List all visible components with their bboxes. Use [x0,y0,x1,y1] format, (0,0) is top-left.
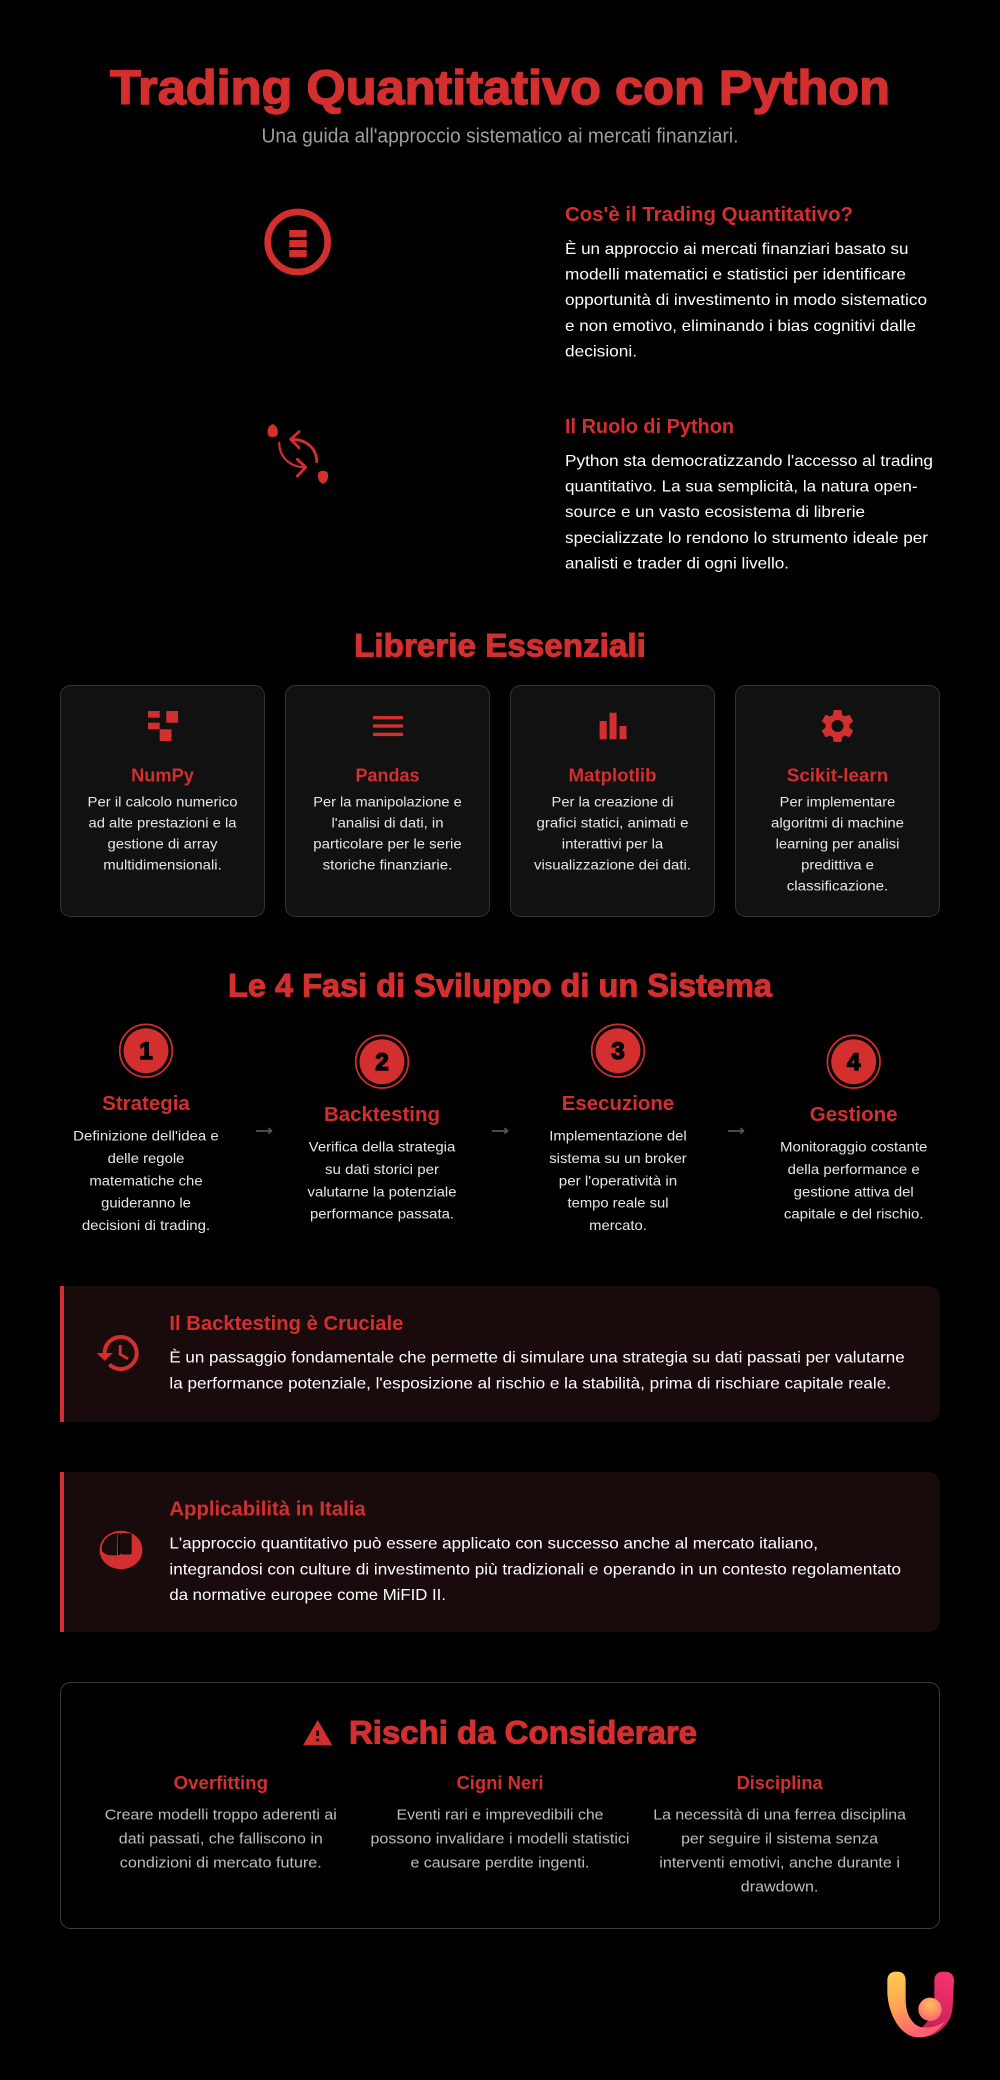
arrow: step 3 to 4 [728,1128,744,1134]
risk: Cigni Neri: Cigni Neri [456,1773,544,1793]
panel: Matplotlib [510,686,714,916]
badge: 2: 2 [375,1049,389,1076]
panel: backtesting callout [60,1286,940,1422]
description: Gestione: della performance e [788,1161,920,1177]
text block: backtesting: È un passaggio fondamentale che permette di simulare una strategia su dati passati per valutarne [169,1348,905,1367]
title: Trading Quantitativo con Python [110,62,890,115]
text block: what is quant trading [565,239,927,360]
description: Gestione [780,1138,928,1222]
description: Backtesting: valutarne la potenziale [308,1183,457,1199]
description: Strategia: decisioni di trading. [82,1217,210,1233]
description: Scikit-learn: learning per analisi [776,836,899,852]
description: Pandas [313,794,462,873]
description: Matplotlib [534,794,691,873]
badge: 3: 3 [611,1038,625,1065]
icon: history clock [97,1335,139,1371]
description: NumPy [88,794,238,873]
heading: risks: Rischi da Considerare [349,1714,697,1750]
description: Scikit-learn [771,794,904,894]
step 1: Strategia [73,1024,219,1233]
description: Esecuzione: per l'operatività in [559,1172,677,1188]
heading: backtesting: Il Backtesting è Cruciale [169,1313,403,1335]
description: Strategia: Definizione dell'idea e [73,1128,219,1144]
risk: Cigni Neri [370,1773,630,1871]
label: Scikit-learn: Scikit-learn [787,766,888,786]
risk: Disciplina: per seguire il sistema senza [681,1830,879,1847]
panel: applicability in Italy [60,1472,940,1632]
text block: role of python [565,453,933,572]
text block: role of python: quantitativo. La sua semplicità, la natura open- [565,479,918,496]
description: Pandas: l'analisi di dati, in [332,815,444,831]
risk: Overfitting: dati passati, che falliscono in [119,1830,323,1847]
arrow: step 1 to 2 [256,1128,272,1134]
description: Esecuzione [549,1128,687,1233]
description: Strategia: delle regole [108,1150,185,1166]
logo [887,1972,954,2037]
description: NumPy: gestione di array [108,836,218,852]
heading: libraries: Librerie Essenziali [354,628,646,664]
description: Matplotlib: Per la creazione di [552,794,674,810]
description: NumPy: multidimensionali. [103,857,222,873]
risk: Disciplina: drawdown. [741,1878,818,1895]
panel: NumPy [60,686,264,916]
heading: what is quant trading: Cos'è il Trading Quantitativo? [565,204,853,226]
heading: role of python: Il Ruolo di Python [565,416,734,438]
text block: what is quant trading: e non emotivo, eliminando i bias cognitivi dalle [565,318,916,335]
description: Scikit-learn: classificazione. [787,878,888,894]
risk: Overfitting: Overfitting [174,1773,268,1793]
icon: warning [303,1720,332,1745]
header [110,62,890,148]
risk: Disciplina: Disciplina [737,1773,824,1793]
text block: what is quant trading: opportunità di investimento in modo sistematico [565,292,927,309]
icon: gear [822,710,853,742]
step 4: Gestione [780,1035,928,1222]
text block: what is quant trading: decisioni. [565,343,637,360]
panel: Scikit-learn [736,686,940,916]
description: Pandas: particolare per le serie [313,836,462,852]
heading: development phases: Le 4 Fasi di Sviluppo di un Sistema [228,968,772,1004]
label: Strategia: Strategia [102,1093,191,1115]
risk: Overfitting: Creare modelli troppo aderenti ai [105,1806,337,1823]
text block: backtesting [169,1348,905,1393]
label: Gestione: Gestione [810,1104,898,1126]
section: what is quant trading [268,204,927,360]
risk: Cigni Neri: e causare perdite ingenti. [410,1854,590,1871]
icon: python arrows [268,424,328,484]
text block: Italy: L'approccio quantitativo può essere applicato con successo anche al mercato italiano, [169,1536,818,1553]
panel: Pandas [286,686,490,916]
description: Strategia: guideranno le [101,1195,191,1211]
description: Gestione: gestione attiva del [794,1183,914,1199]
text block: role of python: Python sta democratizzando l'accesso al trading [565,453,933,470]
badge: 1 [120,1024,172,1077]
step 2: Backtesting [308,1035,457,1222]
description: Strategia [73,1128,219,1233]
text block: backtesting: la performance potenziale, l'esposizione al rischio e la stabilità, prima di rischiare capitale reale. [169,1376,891,1393]
icon: Italy globe [100,1531,142,1569]
icon: blocks [148,711,178,741]
risk: Overfitting: condizioni di mercato future. [120,1854,322,1871]
risk: Disciplina: La necessità di una ferrea disciplina [653,1806,907,1823]
icon: circle with bars [268,212,328,272]
text block: role of python: analisti e trader di ogni livello. [565,555,789,572]
risk: Overfitting [105,1773,337,1871]
label: Pandas: Pandas [356,766,420,786]
description: NumPy: Per il calcolo numerico [88,794,238,810]
badge: 4 [827,1035,880,1088]
description: NumPy: ad alte prestazioni e la [88,815,237,831]
description: Pandas: storiche finanziarie. [323,857,452,873]
badge: 4: 4 [847,1049,861,1076]
risk: Cigni Neri: possono invalidare i modelli statistici [370,1830,630,1847]
description: Scikit-learn: algoritmi di machine [771,815,904,831]
risk: Disciplina: interventi emotivi, anche durante i [659,1854,900,1871]
label: Esecuzione: Esecuzione [562,1093,674,1115]
label: Matplotlib: Matplotlib [568,766,657,786]
description: Esecuzione: Implementazione del [549,1128,687,1144]
section: role of python [268,416,933,572]
description: Matplotlib: visualizzazione dei dati. [534,857,691,873]
description: Matplotlib: interattivi per la [562,836,663,852]
text block: what is quant trading: modelli matematici e statistici per identificare [565,267,906,284]
description: Esecuzione: sistema su un broker [549,1150,687,1166]
description: Backtesting: su dati storici per [325,1161,439,1177]
arrow: step 2 to 3 [492,1128,508,1134]
description: Gestione: capitale e del rischio. [784,1206,924,1222]
text block: what is quant trading: È un approccio ai mercati finanziari basato su [565,239,908,258]
text block: Italy: integrandosi con culture di investimento più tradizionali e operando in un contesto regolamentato [169,1561,901,1578]
description: Esecuzione: tempo reale sul [568,1195,668,1211]
risk: Disciplina [653,1773,907,1895]
description: Backtesting: Verifica della strategia [309,1138,456,1154]
description: Scikit-learn: Per implementare [780,794,896,810]
label: Backtesting: Backtesting [324,1104,440,1126]
icon: bar chart [600,713,626,739]
subtitle: Una guida all'approccio sistematico ai mercati finanziari. [262,126,738,148]
description: Pandas: Per la manipolazione e [313,794,462,810]
panel: risks [60,1682,940,1928]
description: Matplotlib: grafici statici, animati e [536,815,689,831]
heading: Italy: Applicabilità in Italia [169,1499,367,1521]
text block: role of python: source e un vasto ecosistema di librerie [565,504,865,521]
risk: Cigni Neri: Eventi rari e imprevedibili che [396,1806,604,1823]
text block: role of python: specializzate lo rendono lo strumento ideale per [565,530,929,547]
badge: 3 [592,1024,644,1077]
description: Strategia: matematiche che [89,1172,203,1188]
description: Esecuzione: mercato. [589,1217,647,1233]
label: NumPy: NumPy [131,766,194,786]
description: Scikit-learn: predittiva e [801,857,874,873]
text block: Italy [169,1536,901,1604]
step 3: Esecuzione [549,1024,687,1233]
badge: 1: 1 [139,1038,153,1065]
badge: 2 [356,1035,408,1088]
icon: lines [373,716,403,736]
text block: Italy: da normative europee come MiFID II. [169,1587,446,1604]
description: Backtesting: performance passata. [310,1206,454,1222]
description: Backtesting [308,1138,457,1222]
description: Gestione: Monitoraggio costante [780,1138,928,1154]
